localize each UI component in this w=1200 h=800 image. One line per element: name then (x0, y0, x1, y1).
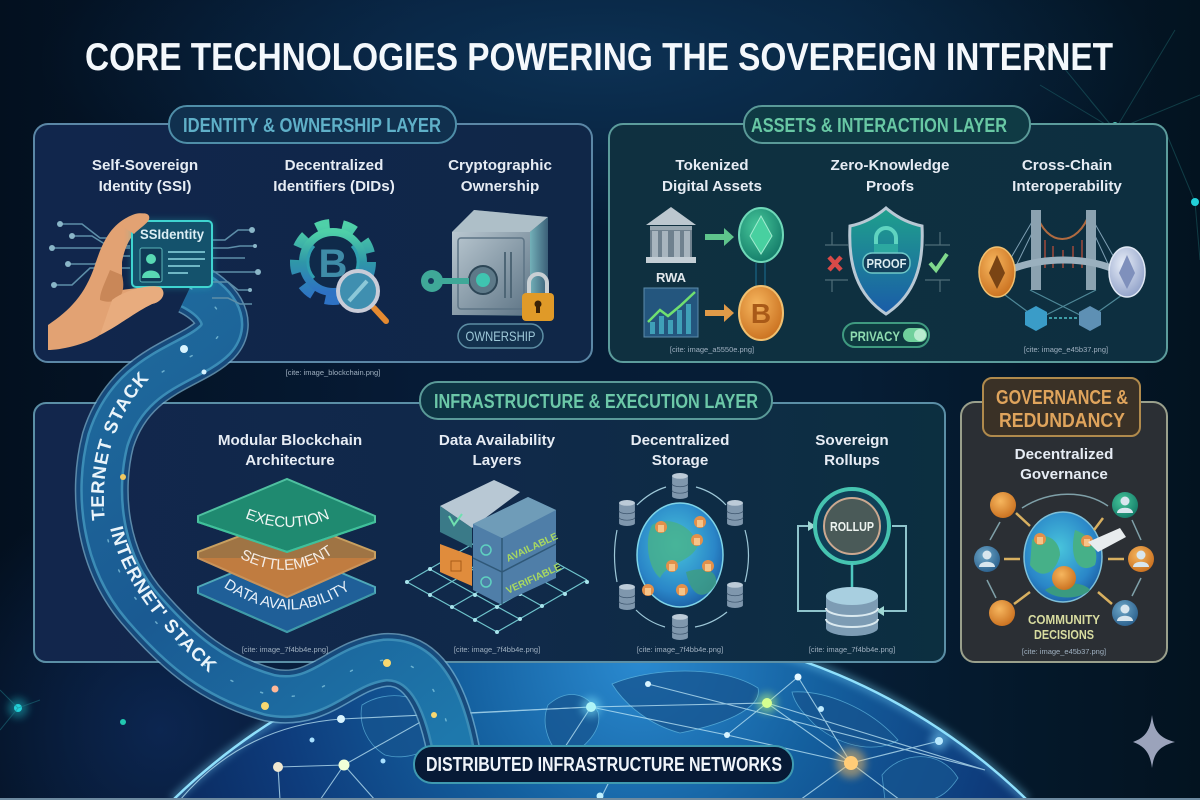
card title: zero-knowledge proofs: Zero-Knowledge (831, 157, 949, 174)
diagram: sovereign rollup loop (798, 489, 906, 636)
badge: ownership (458, 324, 543, 348)
card title: cryptographic ownership: Cryptographic (448, 157, 552, 174)
icon: hand holding glowing identity card: SSIdentity (140, 226, 204, 242)
icon: bank to token flow: B (751, 298, 771, 329)
heading: assets and interaction layer: ASSETS & INTERACTION LAYER (751, 115, 1007, 137)
icon: cross-chain bridge with coins (979, 210, 1145, 331)
diagram: modular blockchain layer stack: DATA AVAILABILITY (224, 578, 347, 610)
card title: tokenized digital assets: Digital Assets (662, 178, 762, 195)
card title: cross-chain interoperability: Cross-Chain (1022, 157, 1112, 174)
globe: distributed infrastructure network (173, 626, 1027, 800)
caption: identity panel: [cite: image_blockchain.png] (286, 368, 380, 377)
card title: sovereign rollups: Rollups (824, 452, 880, 469)
card title: sovereign rollups: Sovereign (815, 432, 889, 449)
ribbon: internet stack: INTERNET' STACK (110, 526, 218, 673)
heading: identity and ownership layer: IDENTITY & OWNERSHIP LAYER (183, 115, 441, 137)
heading: governance and redundancy: REDUNDANCY (999, 410, 1126, 432)
icon: proof shield with cross and check (825, 208, 950, 314)
card title: cross-chain interoperability: Interoperability (1012, 178, 1122, 195)
icon: gear with bitcoin and magnifier (297, 226, 386, 321)
diagram: decentralized governance globe (974, 492, 1154, 626)
card title: decentralized storage: Decentralized (631, 432, 729, 449)
card title: modular blockchain architecture: Modular Blockchain (218, 432, 362, 449)
diagram: data availability blocks on grid: AVAILABLE (505, 531, 560, 565)
heading: infrastructure and execution layer: INFRASTRUCTURE & EXECUTION LAYER (434, 391, 758, 413)
diagram: decentralized storage globe with nodes (614, 473, 748, 640)
heading: governance and redundancy (983, 378, 1140, 436)
icon: hand holding glowing identity card (48, 213, 261, 350)
card title: data availability layers: Data Availability (439, 432, 555, 449)
card title: zero-knowledge proofs: Proofs (866, 178, 914, 195)
card title: decentralized identifiers: Decentralized (285, 157, 383, 174)
diagram: data availability blocks on grid (405, 480, 589, 634)
panel: governance and redundancy (961, 402, 1167, 662)
card title: decentralized governance: Governance (1020, 466, 1108, 483)
card title: self-sovereign identity: Identity (SSI) (99, 178, 191, 195)
caption: modular blockchain: [cite: image_7f4bb4e.png] (242, 645, 328, 654)
heading: identity and ownership layer (169, 106, 456, 143)
badge: privacy toggle (843, 323, 929, 347)
caption: governance: [cite: image_e45b37.png] (1022, 647, 1106, 656)
caption: data availability: [cite: image_7f4bb4e.png] (454, 645, 540, 654)
icon: safe with key and padlock (421, 210, 554, 321)
label: community decisions: COMMUNITY (1028, 612, 1100, 627)
badge: ownership: OWNERSHIP (466, 328, 536, 344)
diagram: modular blockchain layer stack: SETTLEMENT (241, 544, 330, 570)
card title: decentralized storage: Storage (652, 452, 708, 469)
caption: cross-chain: [cite: image_e45b37.png] (1024, 345, 1108, 354)
label: distributed infrastructure networks: DISTRIBUTED INFRASTRUCTURE NETWORKS (426, 754, 782, 776)
badge: privacy toggle: PRIVACY (850, 328, 901, 344)
diagram: modular blockchain layer stack: EXECUTION (246, 508, 329, 528)
card title: data availability layers: Layers (473, 452, 521, 469)
card title: self-sovereign identity: Self-Sovereign (92, 157, 198, 174)
label: distributed infrastructure networks (414, 746, 793, 783)
ribbon: internet stack: TERNET STACK (91, 371, 150, 521)
caption: decentralized storage: [cite: image_7f4bb4e.png] (637, 645, 723, 654)
panel: identity and ownership layer (34, 124, 592, 362)
icon: proof shield with cross and check: PROOF (866, 256, 907, 271)
caption: tokenized assets: [cite: image_a5550e.png] (670, 345, 754, 354)
panel: assets and interaction layer (609, 124, 1167, 362)
heading: governance and redundancy: GOVERNANCE & (996, 387, 1128, 409)
icon: bank to token flow (644, 207, 783, 340)
icon: bank to token flow: RWA (656, 270, 687, 285)
card title: cryptographic ownership: Ownership (461, 178, 539, 195)
label: community decisions (1028, 612, 1100, 642)
icon: gear with bitcoin and magnifier: B (319, 242, 347, 286)
card title: modular blockchain architecture: Architecture (245, 452, 335, 469)
card title: decentralized identifiers: Identifiers (DIDs) (273, 178, 395, 195)
panel: infrastructure and execution layer (34, 403, 945, 662)
card title: tokenized digital assets: Tokenized (675, 157, 749, 174)
diagram: data availability blocks on grid: VERIFIABLE (505, 561, 563, 597)
card title: decentralized governance: Decentralized (1015, 446, 1113, 463)
bottom edge strip (0, 798, 1200, 800)
diagram: modular blockchain layer stack (197, 478, 376, 634)
ribbon: internet stack (74, 270, 480, 746)
label: community decisions: DECISIONS (1034, 627, 1094, 642)
caption: sovereign rollups: [cite: image_7f4bb4e.png] (809, 645, 895, 654)
icon: sparkle watermark (1133, 715, 1175, 768)
heading: assets and interaction layer (744, 106, 1030, 143)
heading: infrastructure and execution layer (420, 382, 772, 419)
diagram: sovereign rollup loop: ROLLUP (830, 520, 874, 534)
